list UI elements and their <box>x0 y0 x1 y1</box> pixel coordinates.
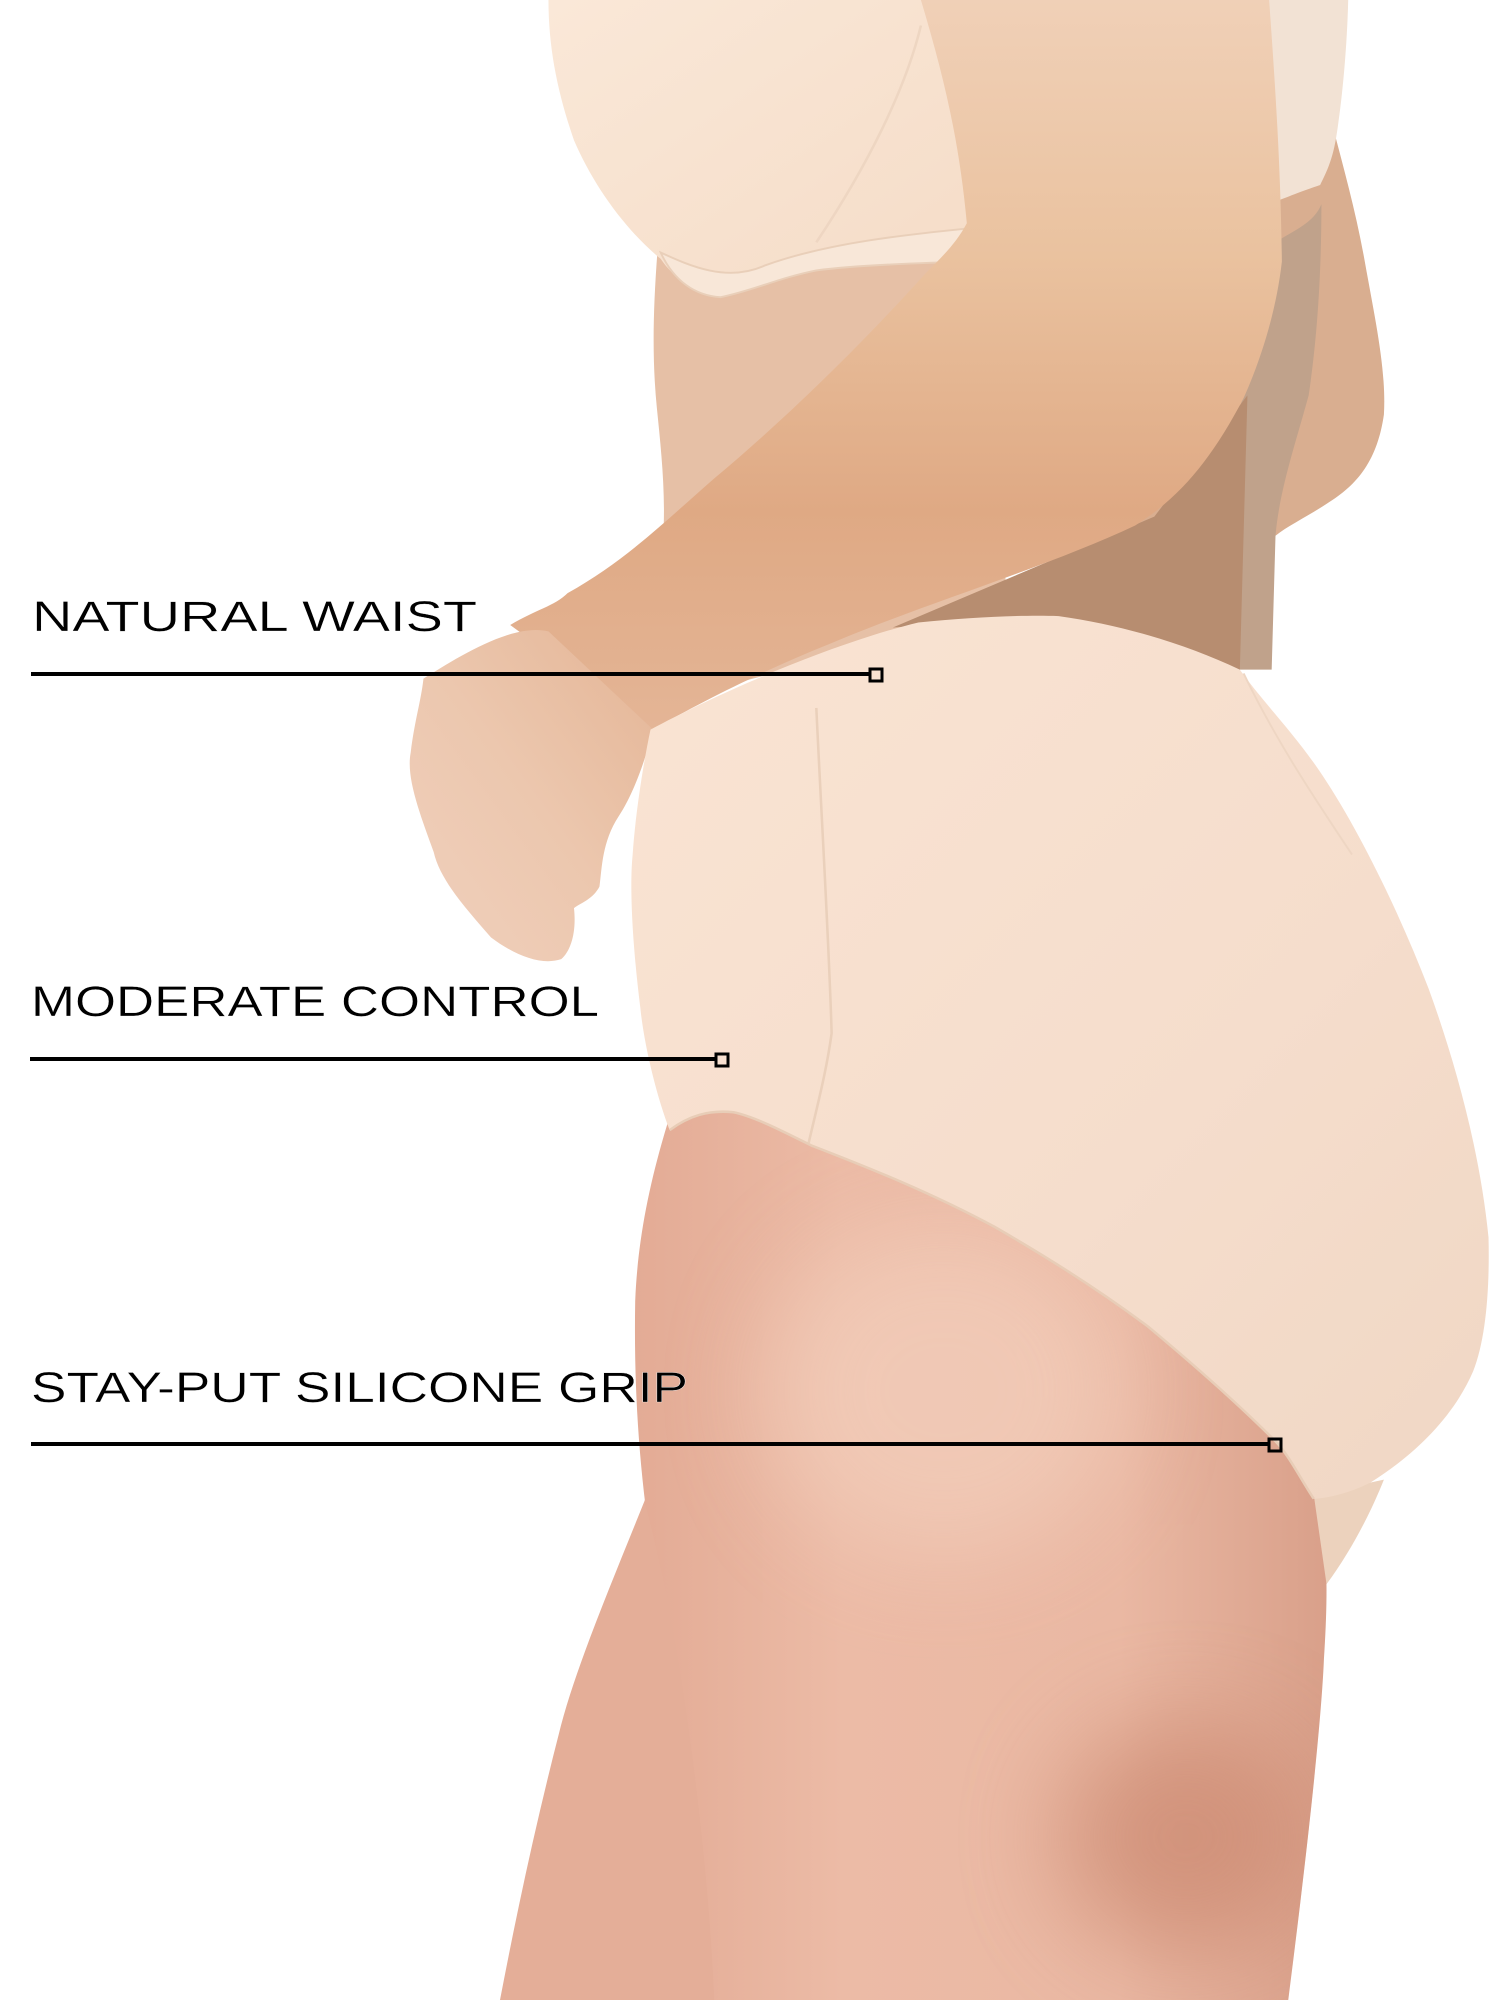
waist shadow <box>893 395 1247 672</box>
bra cup <box>548 0 982 297</box>
thigh shading <box>765 1224 1314 1952</box>
hand <box>410 630 653 961</box>
legs <box>500 1097 1327 2000</box>
back strap <box>1256 0 1348 202</box>
callout: stay-put silicone grip <box>31 1364 1281 1451</box>
torso <box>654 217 1008 714</box>
thigh highlight <box>765 1224 1122 1556</box>
side seam <box>809 708 832 1143</box>
knee shading <box>1059 1722 1314 1952</box>
far arm and back <box>1084 102 1384 663</box>
marker <box>870 669 882 681</box>
marker <box>716 1054 728 1066</box>
bra band <box>661 227 982 297</box>
arm <box>510 0 1282 730</box>
rear leg <box>500 1499 765 2000</box>
brief lining <box>1314 1480 1384 1584</box>
label: MODERATE CONTROL <box>31 978 599 1026</box>
leader line <box>30 1057 715 1061</box>
bra <box>548 0 982 297</box>
bra strap seam <box>816 26 921 242</box>
shadowed back panel <box>1231 204 1321 670</box>
label: NATURAL WAIST <box>32 593 477 641</box>
leader line <box>31 1442 1268 1446</box>
brief body <box>631 616 1489 1499</box>
marker <box>1269 1439 1281 1451</box>
callout: moderate control <box>30 978 728 1066</box>
label: STAY-PUT SILICONE GRIP <box>31 1364 688 1412</box>
front thigh <box>635 1097 1327 2000</box>
figure: simplified flat silhouette <box>410 0 1489 2000</box>
brief <box>631 616 1489 1499</box>
back seam <box>1244 673 1352 855</box>
leg edge <box>670 1112 1314 1499</box>
leader line <box>31 672 869 676</box>
callout: natural waist <box>31 593 882 681</box>
